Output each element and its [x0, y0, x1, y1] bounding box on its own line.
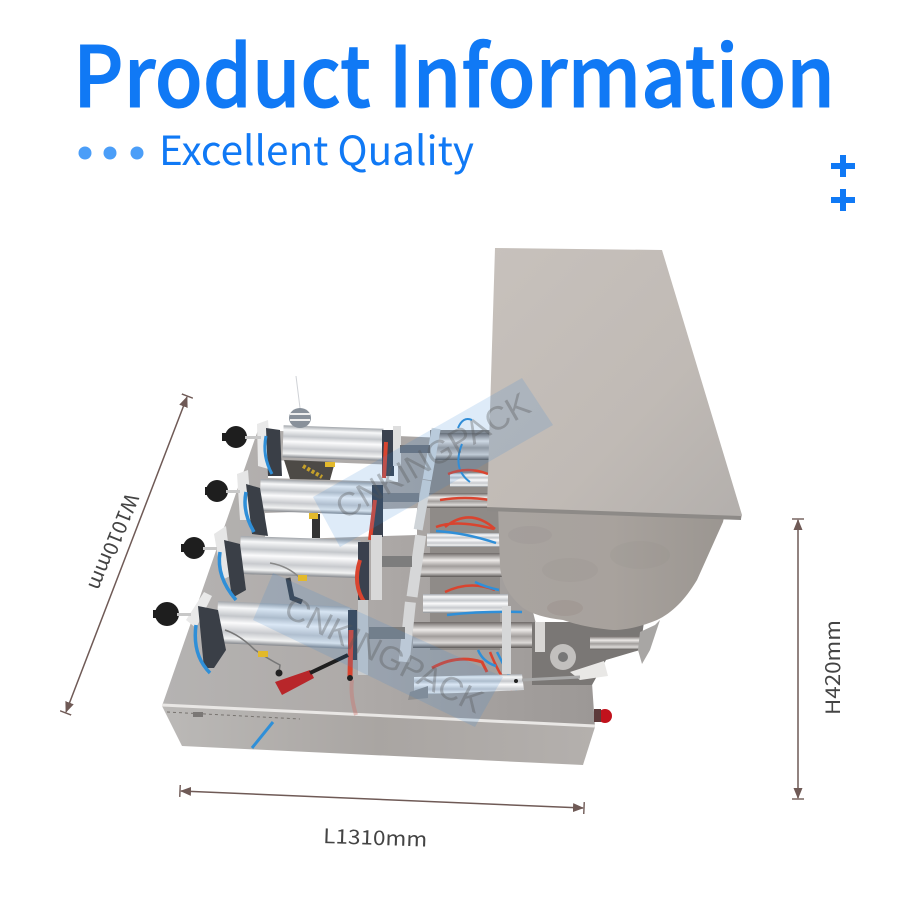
subtitle with bullet dots: Excellent Quality: [159, 119, 474, 177]
machine: black adjusting knobs: [153, 426, 261, 626]
arrow: length dimension: [181, 791, 583, 808]
machine: cylinder row 4: [186, 592, 405, 681]
arrow: width dimension: [66, 397, 187, 712]
machine: hopper body: [498, 505, 725, 630]
label: width: W1010mm: [82, 490, 147, 595]
machine: outlet valve assembly: [532, 620, 660, 685]
machine: cylinder row 2: [237, 470, 419, 540]
machine: hopper lid: [487, 248, 742, 520]
title: Product Information: [73, 11, 835, 132]
machine: front pneumatic cylinder and red button: [408, 659, 612, 723]
machine: cylinder row 3: [214, 526, 412, 603]
watermark band lower: CNKINGPACK: [279, 588, 490, 720]
machine: cylinder row 1: [257, 376, 430, 480]
label: length: L1310mm: [323, 820, 428, 853]
watermark band upper: CNKINGPACK: [329, 385, 536, 526]
air hose on front panel: [252, 722, 273, 748]
filling machine photo illustration: [153, 248, 742, 765]
machine: red screwdriver: [275, 655, 348, 695]
machine rear hoppers rods and pistons: [399, 419, 535, 690]
arrow: height dimension: [797, 520, 799, 798]
machine base: [162, 430, 595, 765]
label: height: H420mm: [817, 620, 846, 715]
icon: plus signs: [831, 155, 855, 211]
